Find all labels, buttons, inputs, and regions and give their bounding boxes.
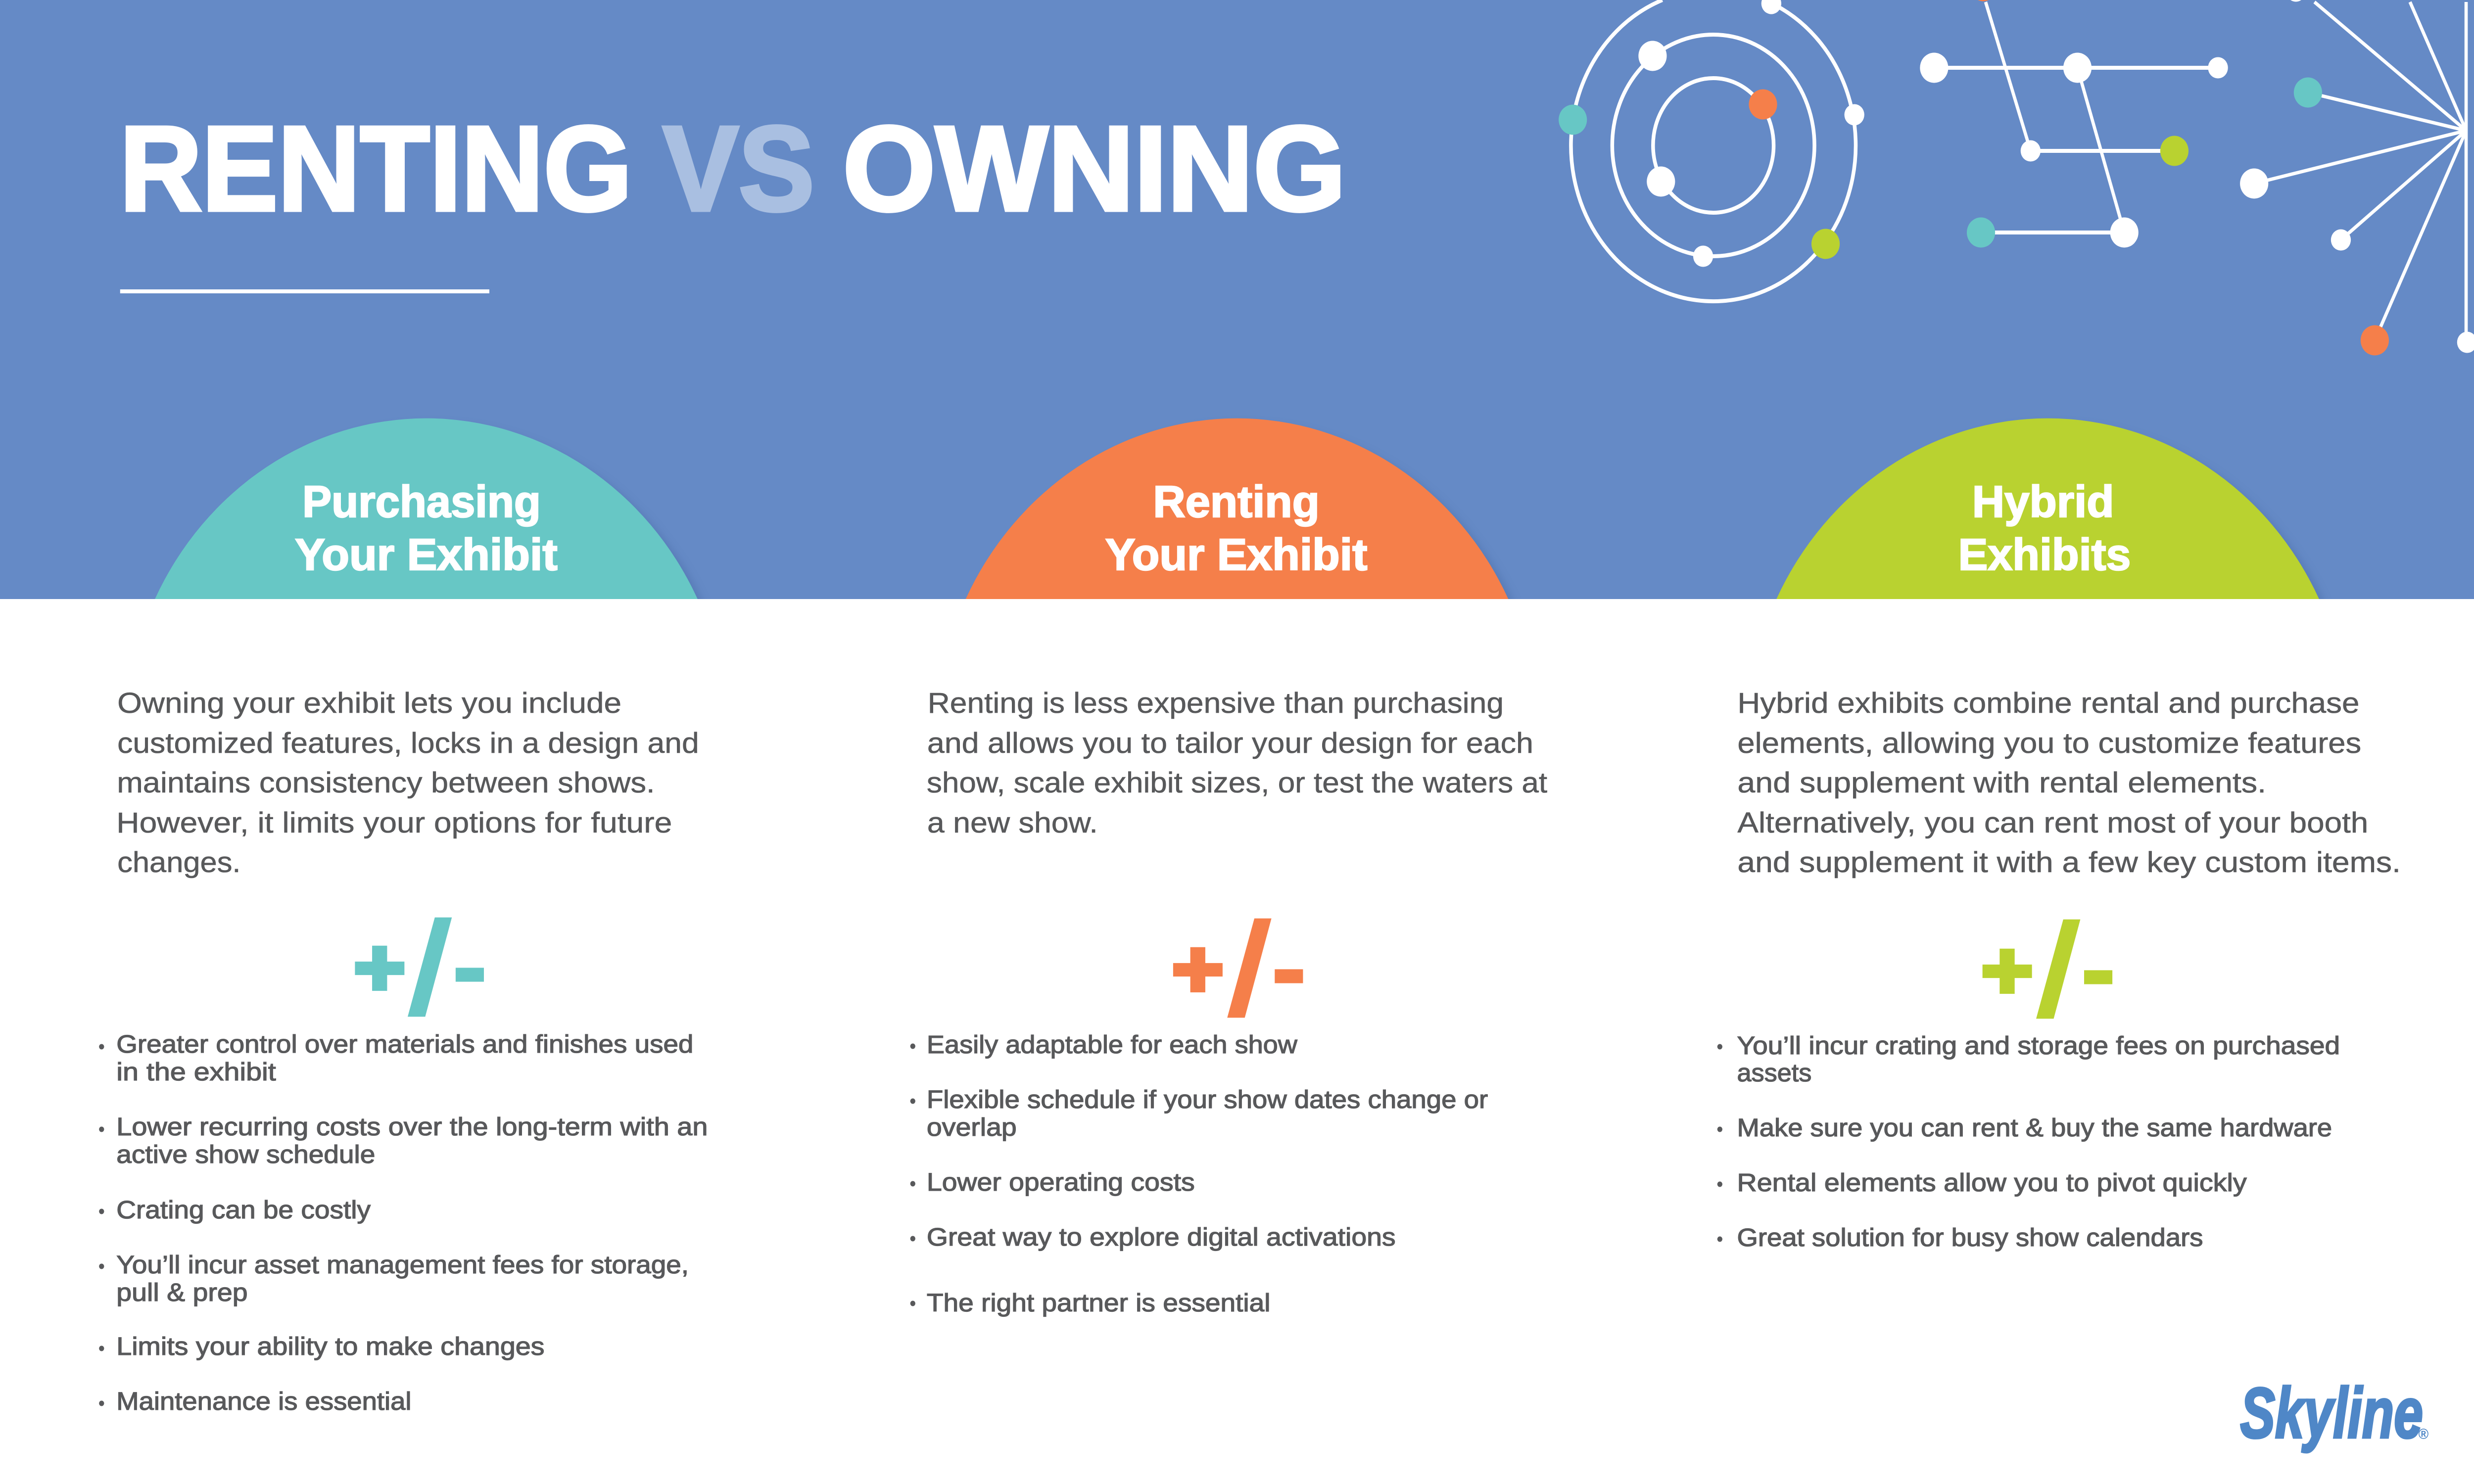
title: OWNING: [843, 101, 1346, 236]
list: purchasing pros and cons: You’ll incur asset management fees for storage,: [116, 1251, 689, 1279]
list: purchasing pros and cons: Crating can be costly: [116, 1196, 371, 1224]
list: purchasing pros and cons: Greater control over materials and finishes used: [116, 1030, 693, 1058]
heading: renting your exhibit: Renting: [1153, 477, 1320, 527]
heading: purchasing your exhibit: Purchasing: [302, 477, 541, 527]
text block: hybrid description: elements, allowing you to customize features: [1737, 727, 2361, 759]
list: renting pros and cons: Great way to explore digital activations: [927, 1223, 1396, 1251]
text block: renting description: and allows you to tailor your design for each: [927, 727, 1533, 759]
list: hybrid pros and cons: Make sure you can rent & buy the same hardware: [1737, 1114, 2332, 1142]
icon: radial hub network: [2240, 0, 2474, 355]
heading: hybrid exhibits: Exhibits: [1958, 530, 2131, 580]
list: renting pros and cons: Flexible schedule if your show dates change or: [927, 1086, 1488, 1113]
list: hybrid pros and cons: [1717, 1032, 2340, 1252]
heading: hybrid exhibits: Hybrid: [1972, 477, 2114, 527]
heading: renting your exhibit: Your Exhibit: [1105, 530, 1367, 580]
icon: orange plus/minus: [1172, 891, 1307, 1047]
title: [120, 101, 1346, 236]
text block: renting description: [927, 687, 1548, 838]
icon: teal plus/minus: /: [402, 890, 458, 1046]
icon: orange plus/minus: /: [1222, 891, 1278, 1047]
logo: Skyline: ®: [2419, 1426, 2428, 1442]
icon: green plus/minus: [1981, 892, 2117, 1048]
title underline: [120, 289, 489, 293]
list: purchasing pros and cons: Lower recurring costs over the long-term with an: [116, 1113, 708, 1141]
logo: Skyline: Skyline: [2240, 1373, 2423, 1453]
text block: renting description: show, scale exhibit sizes, or test the waters at: [927, 766, 1548, 798]
list: hybrid pros and cons: You’ll incur crating and storage fees on purchased: [1737, 1032, 2340, 1060]
icon: orange plus/minus: -: [1270, 901, 1307, 1031]
list: purchasing pros and cons: active show schedule: [116, 1141, 375, 1168]
panel: renting dome: [966, 418, 1515, 605]
list: renting pros and cons: [910, 1031, 1488, 1317]
text block: hybrid description: Alternatively, you can rent most of your booth: [1737, 806, 2368, 838]
text block: purchasing description: [116, 687, 699, 878]
list: renting pros and cons: The right partner is essential: [927, 1289, 1270, 1317]
heading: purchasing your exhibit: [295, 477, 558, 580]
icon: teal plus/minus: +: [354, 923, 405, 1012]
heading: hybrid exhibits: [1958, 477, 2131, 580]
text block: purchasing description: changes.: [117, 846, 241, 878]
list: renting pros and cons: overlap: [927, 1113, 1017, 1141]
icon: teal plus/minus: -: [451, 899, 488, 1030]
text block: renting description: Renting is less expensive than purchasing: [928, 687, 1504, 719]
icon: green plus/minus: -: [2080, 902, 2117, 1032]
icon: green plus/minus: +: [1981, 926, 2033, 1015]
panel: blue header band: [0, 0, 2474, 599]
panel: hybrid dome: [1776, 418, 2326, 605]
text block: renting description: a new show.: [927, 806, 1098, 838]
icon: orange plus/minus: +: [1172, 924, 1224, 1013]
text block: purchasing description: However, it limits your options for future: [116, 806, 672, 838]
list: purchasing pros and cons: pull & prep: [116, 1279, 248, 1306]
heading: renting your exhibit: [1105, 477, 1367, 580]
title: VS: [663, 101, 814, 236]
text block: hybrid description: [1737, 687, 2401, 878]
list: purchasing pros and cons: Maintenance is essential: [116, 1388, 411, 1415]
panel: purchasing dome: [155, 418, 704, 605]
text block: purchasing description: customized features, locks in a design and: [117, 727, 699, 759]
list: purchasing pros and cons: [99, 1030, 708, 1415]
panel: white content area: [0, 599, 2474, 1484]
icon: connected node network: [1920, 0, 2228, 247]
text block: purchasing description: Owning your exhibit lets you include: [117, 687, 621, 719]
text block: purchasing description: maintains consistency between shows.: [117, 766, 655, 798]
list: renting pros and cons: Lower operating costs: [927, 1168, 1195, 1196]
list: hybrid pros and cons: Rental elements allow you to pivot quickly: [1737, 1169, 2247, 1197]
title: RENTING: [120, 101, 632, 236]
text block: hybrid description: Hybrid exhibits combine rental and purchase: [1737, 687, 2359, 719]
list: hybrid pros and cons: Great solution for busy show calendars: [1737, 1224, 2203, 1252]
list: hybrid pros and cons: assets: [1737, 1059, 1811, 1087]
list: renting pros and cons: Easily adaptable for each show: [927, 1031, 1297, 1059]
heading: purchasing your exhibit: Your Exhibit: [295, 530, 558, 580]
list: purchasing pros and cons: in the exhibit: [116, 1058, 276, 1086]
icon: green plus/minus: /: [2031, 892, 2087, 1048]
text block: hybrid description: and supplement with rental elements.: [1737, 766, 2266, 798]
text block: hybrid description: and supplement it with a few key custom items.: [1737, 846, 2401, 878]
list: purchasing pros and cons: Limits your ability to make changes: [116, 1333, 544, 1360]
icon: teal plus/minus: [354, 890, 488, 1046]
icon: concentric orbit rings with dots: [1559, 0, 1864, 301]
